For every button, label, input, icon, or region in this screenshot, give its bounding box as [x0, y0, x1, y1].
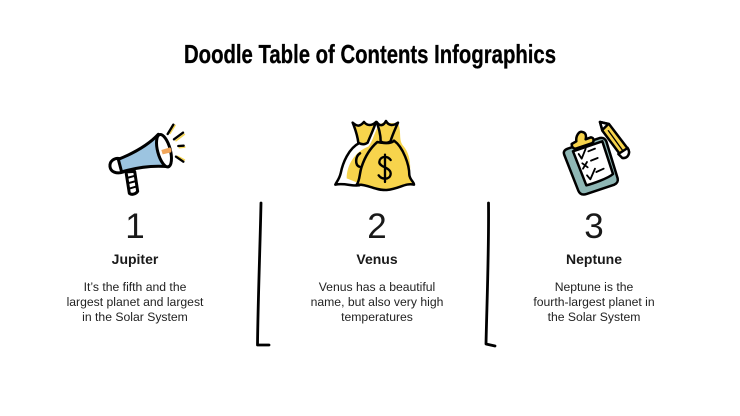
- number 2: 2: [367, 207, 387, 246]
- description: Venus: Venus has a beautiful: [319, 280, 435, 294]
- icon: money bags: [335, 121, 414, 190]
- divider: left doodle line: [258, 203, 269, 345]
- divider: right doodle line: [486, 203, 495, 346]
- description: Jupiter: in the Solar System: [82, 310, 188, 324]
- description: Neptune: Neptune is the: [555, 280, 634, 294]
- icon: megaphone: [110, 125, 185, 194]
- panel: Neptune: [533, 122, 655, 324]
- heading: Jupiter: Jupiter: [112, 251, 159, 267]
- panel: Venus: [311, 121, 443, 324]
- description: Jupiter: It’s the fifth and the: [84, 280, 187, 294]
- title: Doodle Table of Contents Infographics: [184, 39, 556, 69]
- heading: Neptune: Neptune: [566, 251, 622, 267]
- description: Venus: name, but also very high: [311, 295, 443, 309]
- icon: clipboard and pencil: [564, 122, 629, 195]
- heading: Venus: Venus: [356, 251, 398, 267]
- description: Neptune: the Solar System: [548, 310, 640, 324]
- number 3: 3: [584, 207, 604, 246]
- description: Venus: temperatures: [341, 310, 413, 324]
- number 1: 1: [125, 207, 145, 246]
- description: Jupiter: largest planet and largest: [67, 295, 204, 309]
- description: Neptune: fourth-largest planet in: [533, 295, 655, 309]
- panel: Jupiter: [67, 125, 204, 324]
